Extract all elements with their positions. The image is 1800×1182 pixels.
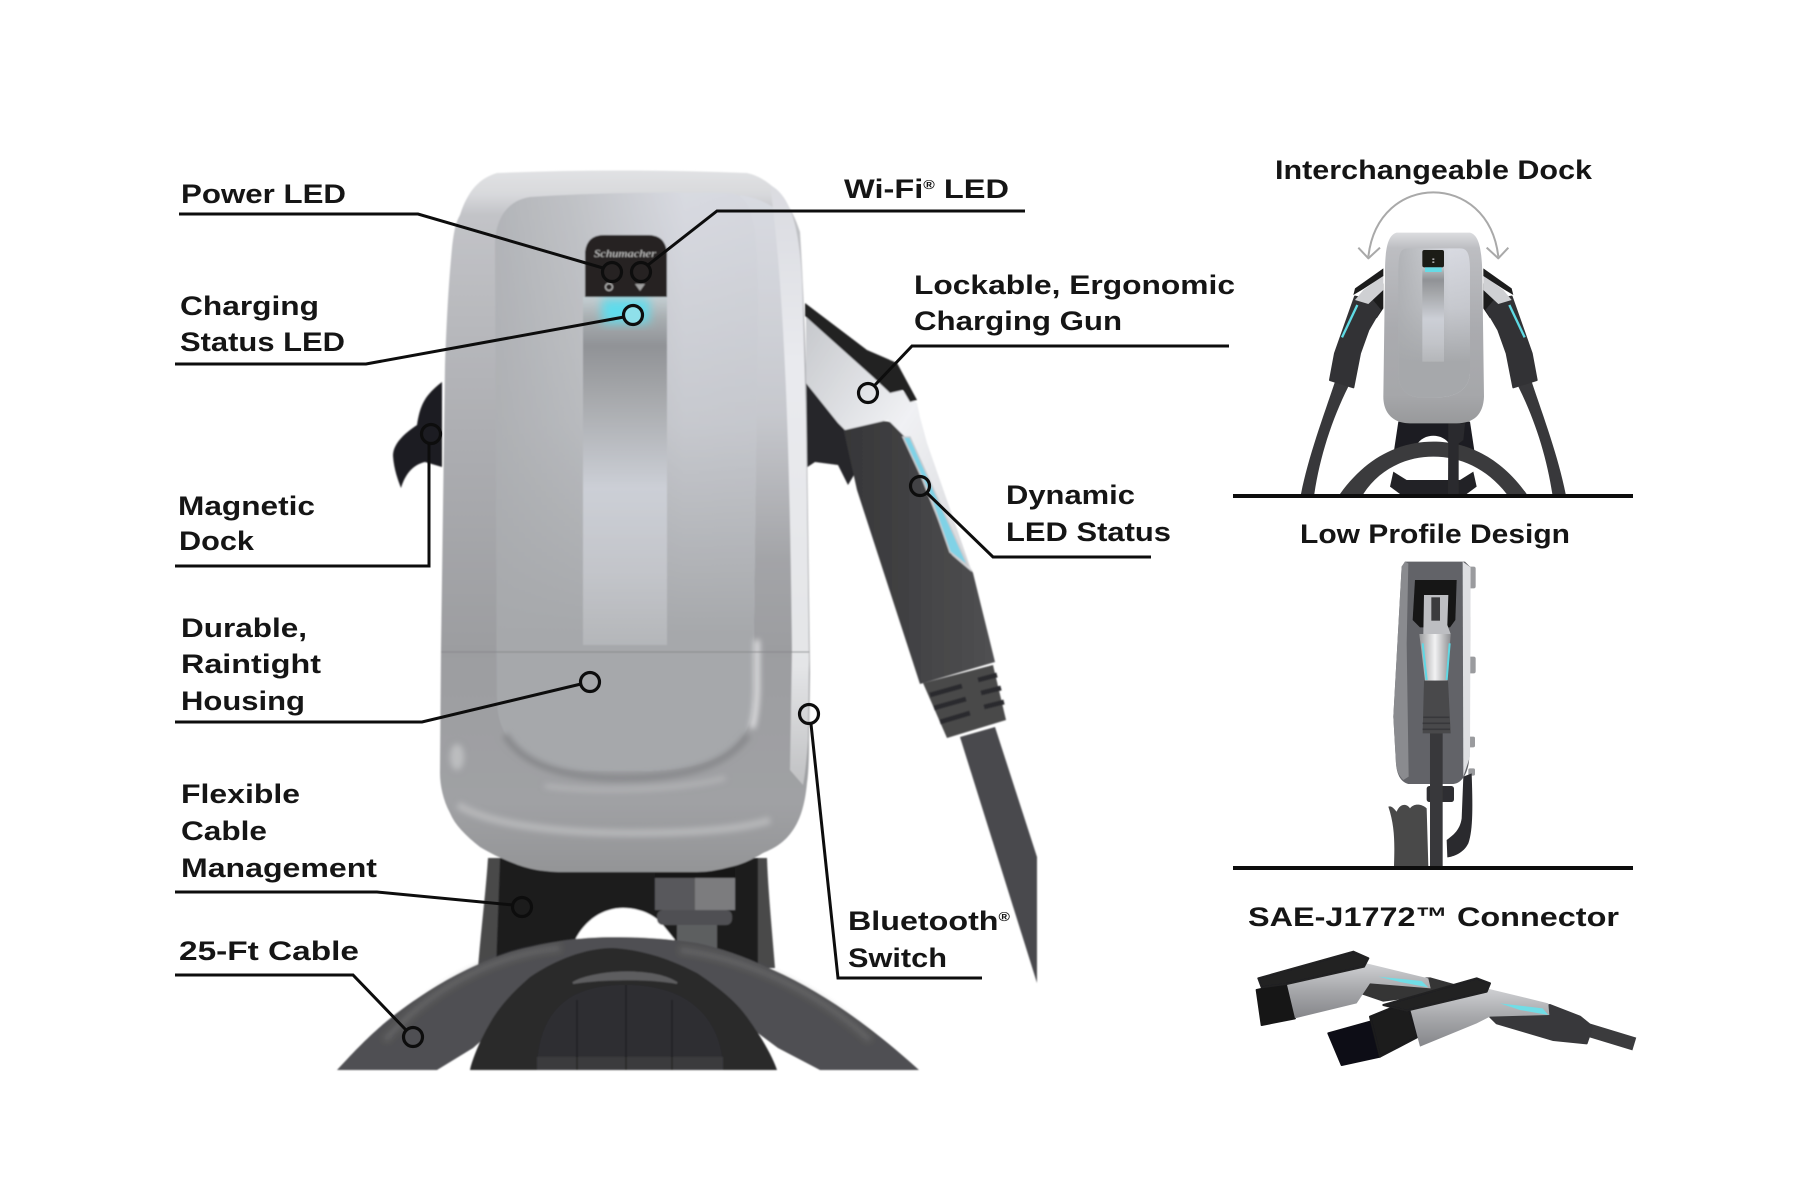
gun silver body [806,317,972,572]
leader line [175,892,513,905]
body [1410,988,1549,1047]
housing back edge [1463,562,1471,777]
label [848,906,1010,973]
callout: Lockable, Ergonomic Charging Gun [858,270,1235,402]
charging gun dock interior [806,383,857,485]
marker [910,476,930,496]
lower lip highlight [458,805,770,833]
gun head slot [1431,597,1440,621]
LEDs [1423,643,1450,680]
label: ® [923,177,935,192]
left gun and cable [1301,268,1383,494]
mini housing [1383,233,1484,423]
LED [1500,1003,1548,1015]
cable to gun [960,727,1037,983]
illustration: low profile side view [1388,562,1476,866]
cable highlight [385,948,870,1040]
heading: Low Profile Design: Low Profile Design [1300,519,1570,549]
label: LED [935,174,1009,204]
marker [858,384,878,402]
marker [422,424,440,444]
leader line [175,317,624,364]
illustration: SAE-J1772 connectors [1257,952,1634,1065]
latch [1258,952,1368,987]
callout: Wi-Fi LED [632,174,1025,282]
leader line [175,975,406,1030]
rotation arrow [1358,192,1508,258]
gun handle [843,421,995,684]
mini LED [1425,267,1442,272]
gun LED strip [903,437,968,566]
back connector [1257,952,1460,1025]
illustration: interchangeable dock [1301,192,1566,494]
label: Power LED [181,179,346,209]
label: Management [181,853,377,883]
panel shading [495,192,758,771]
label [181,613,321,716]
dock recess [1413,580,1457,627]
leader line [927,493,1151,557]
callout: Dynamic LED Status [910,476,1171,557]
gun strain relief [923,665,1006,738]
magnetic dock hook [393,382,442,488]
LED [1378,977,1428,987]
marker [404,1028,422,1046]
left gloss blob [450,744,464,770]
ribs [1423,717,1450,729]
marker [512,898,532,916]
label: Dock [179,526,255,556]
label [914,270,1235,336]
leader line [175,684,581,722]
callout: Bluetooth Switch [800,704,1010,978]
mini panel shading [1398,248,1470,397]
leader line [811,724,982,978]
divider rule 2 [1233,866,1633,870]
leader line [648,211,1025,265]
panel bottom highlight [545,778,725,790]
marker [624,306,642,324]
label: 25-Ft Cable [179,936,359,966]
divider rule 1 [1233,494,1633,498]
callout: Charging Status LED [175,291,642,364]
body [1287,963,1431,1018]
bracket [1393,422,1475,455]
mini display dots [1430,258,1436,264]
mini light strip [1422,267,1444,362]
marker [632,262,650,282]
label: Status LED [180,327,345,357]
cyan charging glow [602,299,649,323]
housing seam [441,651,809,653]
gun head [1423,595,1451,634]
coil [1340,442,1527,494]
panel bottom shadow [505,735,748,778]
label: ® [999,909,1010,924]
coiled cable [337,937,919,1070]
mini display [1422,250,1444,267]
front connector [1328,978,1634,1065]
marker [602,262,622,282]
callout: 25-Ft Cable [175,936,422,1046]
label: Housing [181,686,305,716]
marker [580,672,600,692]
label: Lockable, Ergonomic [914,270,1235,300]
collar [1370,1002,1418,1057]
label [180,291,345,357]
main product illustration: wall charger [337,170,1037,1070]
brand mark: Schumacher [594,248,657,260]
label: LED Status [1006,517,1171,547]
leader line [175,443,429,566]
coil side [1388,805,1428,866]
label: Dynamic [1006,480,1135,510]
label [178,491,315,556]
power icon [606,284,612,290]
housing upper right tint [740,195,798,560]
cable gland [655,868,735,949]
leader line [875,346,1229,385]
side of housing [1393,562,1471,784]
cable [1430,733,1443,866]
mounting bracket [478,858,775,968]
right gun and cable [1483,268,1566,494]
label: Cable [181,816,267,846]
label: Charging Gun [914,306,1122,336]
callout: Flexible Cable Management [175,779,532,916]
bracket arch [1417,436,1450,445]
label [1006,480,1171,547]
cable holder [470,948,777,1070]
cable [1588,1030,1634,1044]
label: Flexible [181,779,300,809]
mini panel [1398,248,1470,397]
housing front edge [1393,562,1409,780]
label: Wi-Fi [844,174,910,204]
gland [1427,786,1454,802]
label: Magnetic [178,491,315,521]
callout: Magnetic Dock [175,424,440,566]
label: Raintight [181,649,321,679]
housing body [440,170,810,872]
heading: SAE-J1772 Connector: SAE-J1772™ Connector [1248,902,1620,932]
wifi icon [635,284,645,291]
tip [1328,1022,1380,1065]
gun latch [805,303,917,402]
gun silver body [1419,634,1451,681]
housing inner panel [495,192,758,771]
rear bracket [1447,773,1472,857]
coil holder [1390,472,1477,494]
lower right gloss highlight [752,640,757,728]
handle [1423,681,1451,733]
tip [1257,983,1295,1025]
control display [585,235,667,297]
handle [1490,1005,1592,1043]
handle [1362,978,1460,1001]
wall mounts [1468,567,1476,776]
label [181,779,377,883]
gland and cable drop [1448,423,1465,494]
label: Charging [180,291,319,321]
label: Durable, [181,613,307,643]
centre light strip [583,297,667,645]
housing right edge highlight [770,185,809,785]
label: Bluetooth [848,906,974,936]
marker [800,704,818,724]
label: Switch [848,943,947,973]
callout: Power LED [179,179,622,282]
leader line [179,214,603,268]
latch [1383,978,1490,1011]
callout: Durable, Raintight Housing [175,613,600,722]
heading: Interchangeable Dock: Interchangeable Dock [1275,155,1593,185]
